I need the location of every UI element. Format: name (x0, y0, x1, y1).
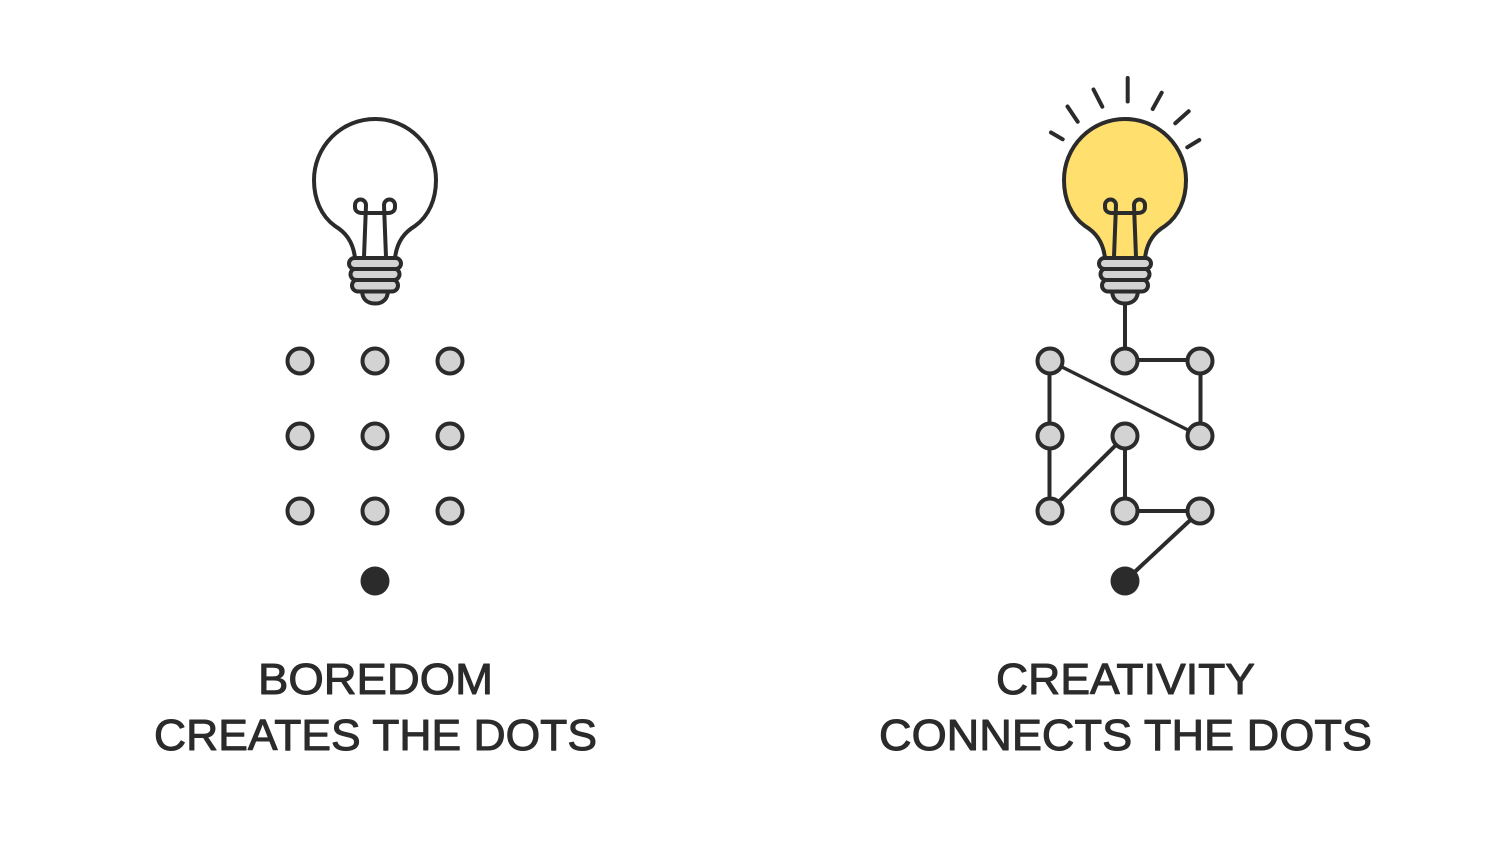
connecting path (1050, 304, 1200, 581)
caption: creativity connects the dots: CREATIVITY (996, 655, 1255, 704)
caption: creativity connects the dots (879, 655, 1372, 760)
black start dot (360, 566, 390, 596)
panel: creativity (879, 78, 1372, 760)
icon: rays of light (1051, 78, 1199, 147)
connected dots (1038, 348, 1212, 524)
panel: boredom (154, 119, 597, 760)
caption: boredom creates the dots: CREATES THE DOTS (154, 711, 597, 760)
dot grid (288, 348, 462, 524)
caption: boredom creates the dots (154, 655, 597, 760)
black end dot (1110, 566, 1140, 596)
icon: lit light bulb (1064, 119, 1186, 304)
icon: unlit light bulb (314, 119, 436, 304)
caption: creativity connects the dots: CONNECTS THE DOTS (879, 711, 1372, 760)
caption: boredom creates the dots: BOREDOM (258, 655, 493, 704)
